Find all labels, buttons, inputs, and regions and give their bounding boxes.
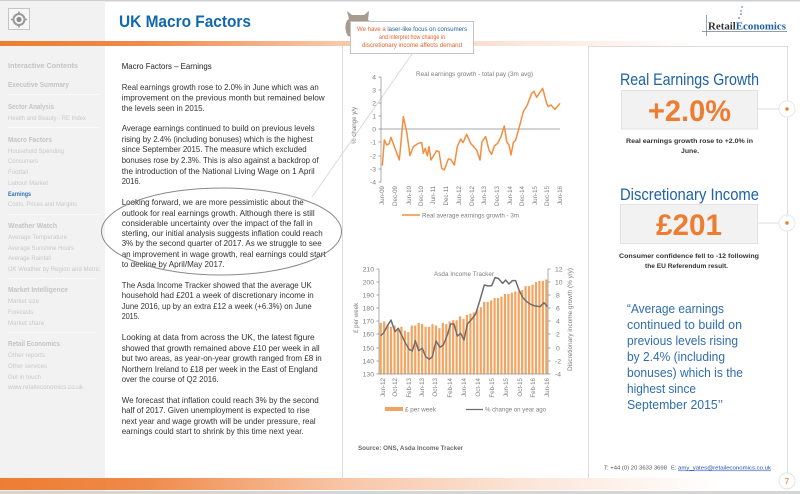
date labels: Oct-13: [432, 377, 439, 397]
time axis: Jun-16: [557, 185, 564, 205]
KPI: real earnings growth: Real Earnings Growth: [620, 71, 759, 89]
value axis: -1: [370, 140, 376, 146]
sidebar navigation: Average Temperature: [8, 234, 67, 241]
KPI: real earnings growth: Real earnings growth rose to +2.0% in: [626, 138, 753, 145]
top orange band: [0, 41, 700, 46]
date labels: Oct-12: [392, 377, 399, 397]
legend: [385, 406, 546, 414]
callout ellipse around outlook paragraph: [102, 188, 342, 275]
body text: earnings commentary: rising by 2.4% (including bonuses) which is the highest: [122, 134, 313, 144]
KPI: discretionary income: the EU Referendum result.: [645, 263, 728, 270]
value axis: [351, 74, 381, 186]
bottom orange band: [0, 478, 720, 490]
time axis: Jun-12: [456, 185, 463, 205]
sidebar navigation: Other reports: [8, 352, 46, 359]
time axis: Dec-12: [469, 185, 476, 206]
value axis: -4: [370, 180, 376, 186]
body text: earnings commentary: showed that growth remained above £10 per week in all: [122, 343, 320, 353]
sidebar navigation: Consumers: [8, 158, 39, 165]
sidebar navigation: Market Intelligence: [8, 285, 68, 294]
value axis: 1: [372, 114, 376, 120]
left axis labels: 130: [363, 372, 374, 378]
body text: earnings commentary: next year and wage growth will be under pressure, real: [122, 416, 316, 426]
date labels: Feb-15: [489, 377, 496, 398]
icon: owl mascot: [345, 11, 382, 37]
time axis: Jun-14: [507, 185, 514, 205]
left axis labels: 200: [363, 280, 374, 286]
time axis: [379, 129, 564, 206]
legend: Real average earnings growth - 3m: [422, 212, 519, 220]
body text: earnings commentary: but two areas, as year-on-year growth ranged from £8 in: [122, 353, 322, 363]
callout: consumer focus message: and interpret how change in: [379, 34, 445, 41]
sidebar navigation: Weather Watch: [8, 221, 57, 230]
date labels: Feb-16: [530, 377, 537, 398]
sidebar navigation: [7, 61, 101, 391]
left axis labels: 160: [363, 332, 374, 338]
source note: Source: ONS, Asda Income Tracker: [358, 445, 463, 452]
body text: earnings commentary: sterling, our initial analysis suggests inflation could reach: [122, 228, 323, 238]
value axis: -2: [370, 154, 376, 160]
sidebar navigation: Health and Beauty - RE Index: [8, 115, 87, 122]
right axis labels: -2: [555, 358, 561, 366]
body text: earnings commentary: Macro Factors – Earnings: [122, 61, 212, 71]
callout: consumer focus message: discretionary income affects demand: [362, 42, 462, 49]
combo chart: Asda Income Tracker: Discretionary income growth (% y/y): [567, 268, 574, 371]
pull quote: September 2015’’: [627, 397, 723, 412]
sidebar navigation: Get in touch: [8, 374, 41, 381]
page number badge: 7: [785, 477, 790, 486]
left axis labels: [363, 266, 374, 378]
callout leader line: [312, 54, 412, 197]
right axis labels: [555, 266, 563, 378]
sidebar navigation: Market size: [8, 298, 39, 305]
body text: earnings commentary: 2015.: [122, 311, 140, 321]
body text: earnings commentary: 3% by the second quarter of 2017. As we struggle to see: [122, 238, 322, 248]
body text: earnings commentary: considerable uncertainty over the impact of the fall in: [122, 218, 313, 228]
right axis labels: 8: [556, 292, 560, 300]
combo chart: Asda Income Tracker: [353, 266, 574, 414]
line chart: real earnings growth: [351, 71, 564, 220]
pull quote: [627, 301, 743, 412]
pull quote: by 2.4% (including: [627, 349, 725, 364]
sidebar navigation: Costs, Prices and Margins: [8, 201, 78, 208]
right axis labels: 2: [556, 332, 560, 338]
income change line: [381, 278, 547, 359]
date labels: [380, 377, 551, 398]
date labels: Feb-14: [447, 377, 454, 398]
combo chart: Asda Income Tracker: Asda Income Tracker: [434, 271, 495, 278]
sidebar navigation: Labour Market: [8, 180, 48, 187]
date labels: Jun-16: [544, 377, 551, 397]
date labels: Oct-14: [475, 377, 482, 397]
sidebar navigation: Retail Economics: [8, 339, 60, 348]
sidebar navigation: UK Weather by Region and Metric: [8, 266, 101, 273]
earnings growth line: [382, 88, 560, 170]
KPI: discretionary income: [619, 186, 795, 270]
sidebar navigation: Earnings: [8, 191, 31, 198]
date labels: Oct-15: [517, 377, 524, 397]
KPI: discretionary income: Consumer confidence fell to -12 following: [619, 253, 759, 260]
logo: Retail Economics: [702, 6, 787, 36]
left axis labels: 190: [363, 292, 374, 300]
value axis: 0: [372, 126, 376, 134]
time axis: Jun-15: [532, 185, 539, 205]
left axis labels: 140: [363, 358, 374, 366]
line chart: real earnings growth: Real earnings growth - total pay (3m avg): [416, 71, 533, 78]
time axis: Dec-10: [418, 185, 425, 206]
KPI: discretionary income: Discretionary Income: [620, 186, 759, 204]
body text: earnings commentary: 2016.: [122, 176, 141, 186]
sidebar navigation: www.retaileconomics.co.uk: [7, 384, 84, 391]
body text: earnings commentary: earnings could start to shrink by this time next year.: [122, 426, 304, 436]
title: UK Macro Factors: [119, 13, 251, 31]
left axis labels: 210: [363, 266, 374, 274]
value axis: 4: [372, 74, 376, 82]
axes: [376, 269, 550, 374]
value axis: 3: [372, 88, 376, 94]
time axis: Dec-14: [519, 185, 526, 206]
pull quote: “Average earnings: [627, 301, 724, 316]
body text: earnings commentary: since September 2015. The measure which excluded: [122, 144, 307, 154]
body text: earnings commentary: bonuses rose by 2.3%. This is also against a backdrop of: [122, 155, 319, 165]
date labels: Jun-12: [380, 377, 387, 397]
date labels: Feb-13: [406, 377, 413, 398]
legend: % change on year ago: [485, 406, 546, 414]
body text: earnings commentary: to decline by April/May 2017.: [122, 259, 225, 269]
right axis labels: 4: [556, 318, 560, 326]
value axis: -3: [370, 166, 376, 174]
body text: earnings commentary: the levels seen in 2015.: [122, 103, 205, 113]
right axis labels: 6: [556, 306, 560, 312]
contact details: [604, 466, 771, 472]
sidebar navigation: Interactive Contents: [8, 61, 78, 70]
legend: £ per week: [405, 406, 437, 414]
contact details: E:: [671, 466, 677, 472]
time axis: Jun-11: [430, 185, 437, 204]
body text: earnings commentary: We forecast that inflation could reach 3% by the second: [122, 395, 319, 405]
left axis labels: 170: [363, 318, 374, 326]
left axis labels: 180: [363, 306, 374, 312]
body text: earnings commentary: an improvement in wage growth, real earnings could start: [122, 249, 326, 259]
value axis: % change y/y: [351, 106, 358, 144]
time axis: Dec-09: [392, 185, 399, 206]
pull quote: highest since: [627, 381, 696, 396]
sidebar navigation: Other services: [8, 363, 48, 370]
body text: earnings commentary: half of 2017. Given unemployment is expected to rise: [122, 405, 310, 415]
body text: earnings commentary: over the course of Q2 2016.: [122, 374, 219, 384]
sidebar navigation: Average Sunshine Hours: [8, 245, 75, 252]
weekly income bars: [381, 280, 546, 374]
right axis labels: 10: [555, 280, 563, 286]
logo: Retail Economics: RetailEconomics: [708, 22, 786, 32]
body text: earnings commentary: household had £201 a week of discretionary income in: [122, 290, 314, 300]
sidebar navigation: Footfall: [8, 169, 28, 176]
KPI: real earnings growth: June.: [681, 148, 699, 155]
body text: earnings commentary: the introduction of the National Living Wage on 1 April: [122, 166, 315, 176]
body text: earnings commentary: Looking at data from across the UK, the latest figure: [122, 332, 315, 342]
pull quote: previous levels rising: [627, 333, 738, 348]
time axis: Dec-11: [443, 185, 450, 206]
time axis: Jun-09: [379, 185, 386, 205]
KPI: discretionary income: £201: [656, 209, 722, 242]
body text: earnings commentary: [122, 61, 326, 436]
panel dividers: [342, 46, 788, 478]
combo chart: Asda Income Tracker: £ per week: [353, 302, 360, 333]
sidebar navigation: Forecasts: [8, 309, 34, 316]
body text: earnings commentary: Northern Ireland to £18 per week in the East of England: [122, 364, 318, 374]
body text: earnings commentary: Real earnings growth rose to 2.0% in June which was an: [122, 82, 319, 92]
date labels: Jun-14: [461, 377, 468, 397]
page number badge: [779, 473, 795, 489]
body text: earnings commentary: outlook for real earnings growth. Although there is still: [122, 208, 315, 218]
left axis labels: 150: [363, 346, 374, 352]
KPI: real earnings growth: [620, 71, 795, 155]
right axis labels: 12: [555, 266, 563, 274]
sidebar navigation: Household Spending: [8, 148, 64, 155]
sidebar navigation: Average Rainfall: [8, 255, 51, 262]
contact details: amy_yates@retaileconomics.co.uk: [678, 466, 771, 472]
icon: settings gear button: [8, 8, 30, 30]
contact details: T: +44 (0) 20 3633 3698: [604, 466, 667, 472]
body text: earnings commentary: The Asda Income Tracker showed that the average UK: [122, 280, 312, 290]
date labels: Jun-13: [419, 377, 426, 397]
sidebar navigation: Executive Summary: [8, 80, 70, 89]
time axis: Jun-10: [406, 185, 413, 205]
time axis: Dec-13: [494, 185, 501, 206]
time axis: Dec-15: [544, 185, 551, 206]
KPI: real earnings growth: +2.0%: [648, 95, 731, 128]
body text: earnings commentary: improvement on the previous month but remained below: [122, 92, 326, 102]
body text: earnings commentary: Average earnings continued to build on previous levels: [122, 123, 315, 133]
date labels: Jun-15: [503, 377, 510, 397]
body text: earnings commentary: June 2016, up by an extra £12 a week (+6.3%) on June: [122, 301, 312, 311]
right axis labels: 0: [556, 346, 560, 352]
pull quote: continued to build on: [627, 317, 742, 332]
right axis labels: -4: [555, 372, 561, 378]
sidebar navigation: Market share: [8, 320, 44, 327]
value axis: 2: [372, 100, 376, 108]
pull quote: bonuses) which is the: [627, 365, 743, 380]
sidebar navigation: Sector Analysis: [8, 102, 54, 111]
body text: earnings commentary: Looking forward, we are more pessimistic about the: [122, 197, 304, 207]
time axis: Jun-13: [481, 185, 488, 205]
callout: consumer focus message: [350, 22, 474, 54]
sidebar navigation: Macro Factors: [8, 135, 52, 144]
callout: consumer focus message: We have a laser-like focus on consumers: [357, 26, 467, 33]
sidebar background: [0, 1, 105, 491]
